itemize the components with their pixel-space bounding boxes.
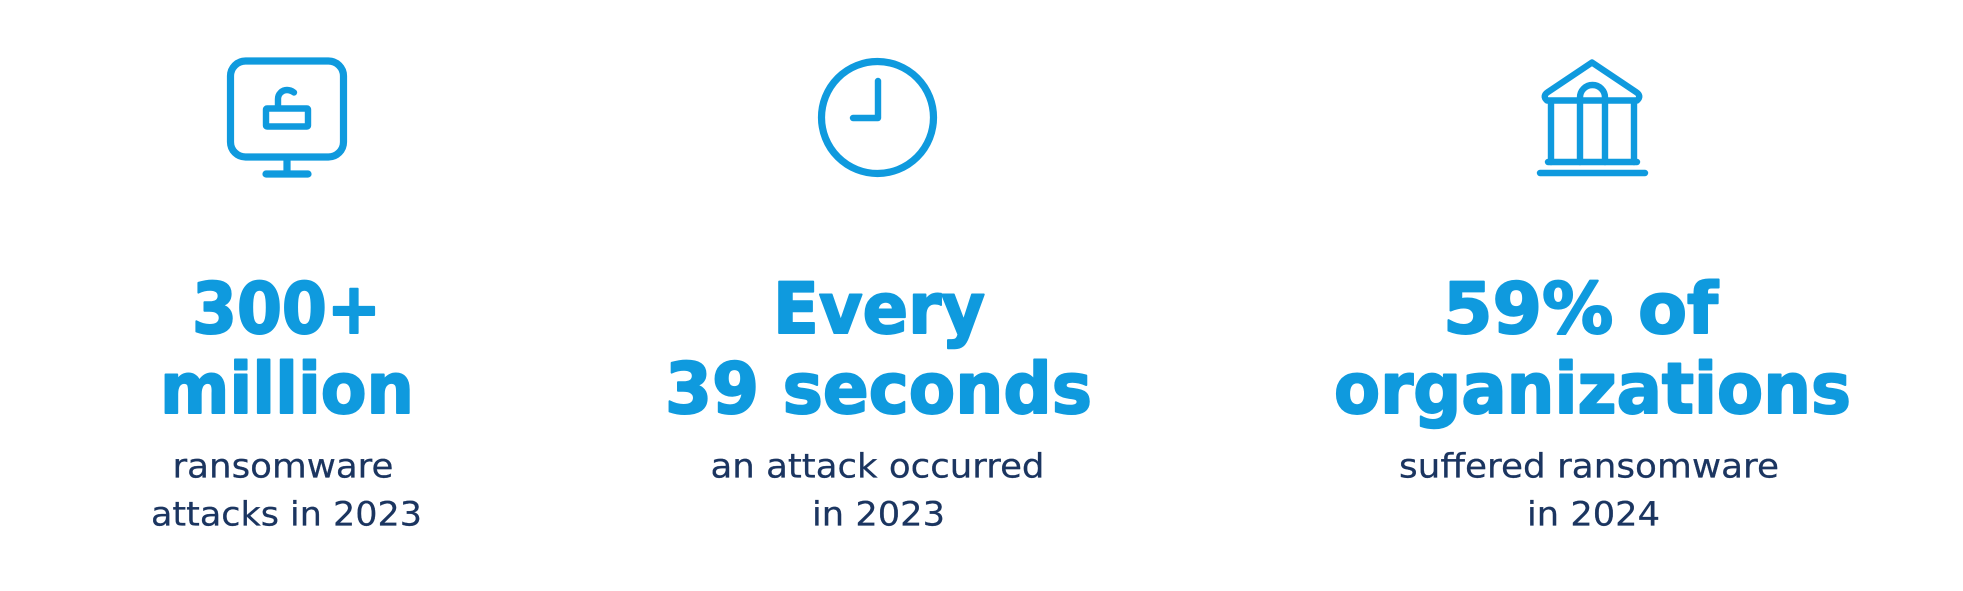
icon: clock (822, 62, 934, 174)
text: suffered ransomware in 2024: suffered ransomware (1399, 446, 1779, 486)
heading: 59% of organizations: 59% of (1443, 268, 1719, 350)
heading: Every 39 seconds (665, 268, 1092, 430)
text: ransomware attacks in 2023 (151, 446, 422, 534)
panel: 59% of organizations (1334, 62, 1851, 534)
text: an attack occurred in 2023 (710, 446, 1044, 534)
panel: 300+ million ransomware attacks (151, 61, 422, 534)
heading: 300+ million: million (160, 348, 414, 430)
heading: Every 39 seconds: Every (773, 268, 985, 350)
heading: 300+ million (160, 268, 414, 430)
icon: monitor with open padlock (230, 61, 344, 174)
icon: bank building (1540, 62, 1645, 173)
text: an attack occurred in 2023: an attack occurred (710, 446, 1044, 486)
text: ransomware attacks in 2023: attacks in 2023 (151, 494, 422, 534)
heading: 59% of organizations: organizations (1334, 348, 1851, 430)
heading: Every 39 seconds: 39 seconds (665, 348, 1092, 430)
heading: 59% of organizations (1334, 268, 1851, 430)
text: ransomware attacks in 2023: ransomware (172, 446, 394, 486)
text: suffered ransomware in 2024 (1399, 446, 1779, 534)
heading: 300+ million: 300+ (192, 268, 381, 350)
panel: every 39 seconds (665, 62, 1092, 534)
text: an attack occurred in 2023: in 2023 (812, 494, 945, 534)
text: suffered ransomware in 2024: in 2024 (1527, 494, 1660, 534)
